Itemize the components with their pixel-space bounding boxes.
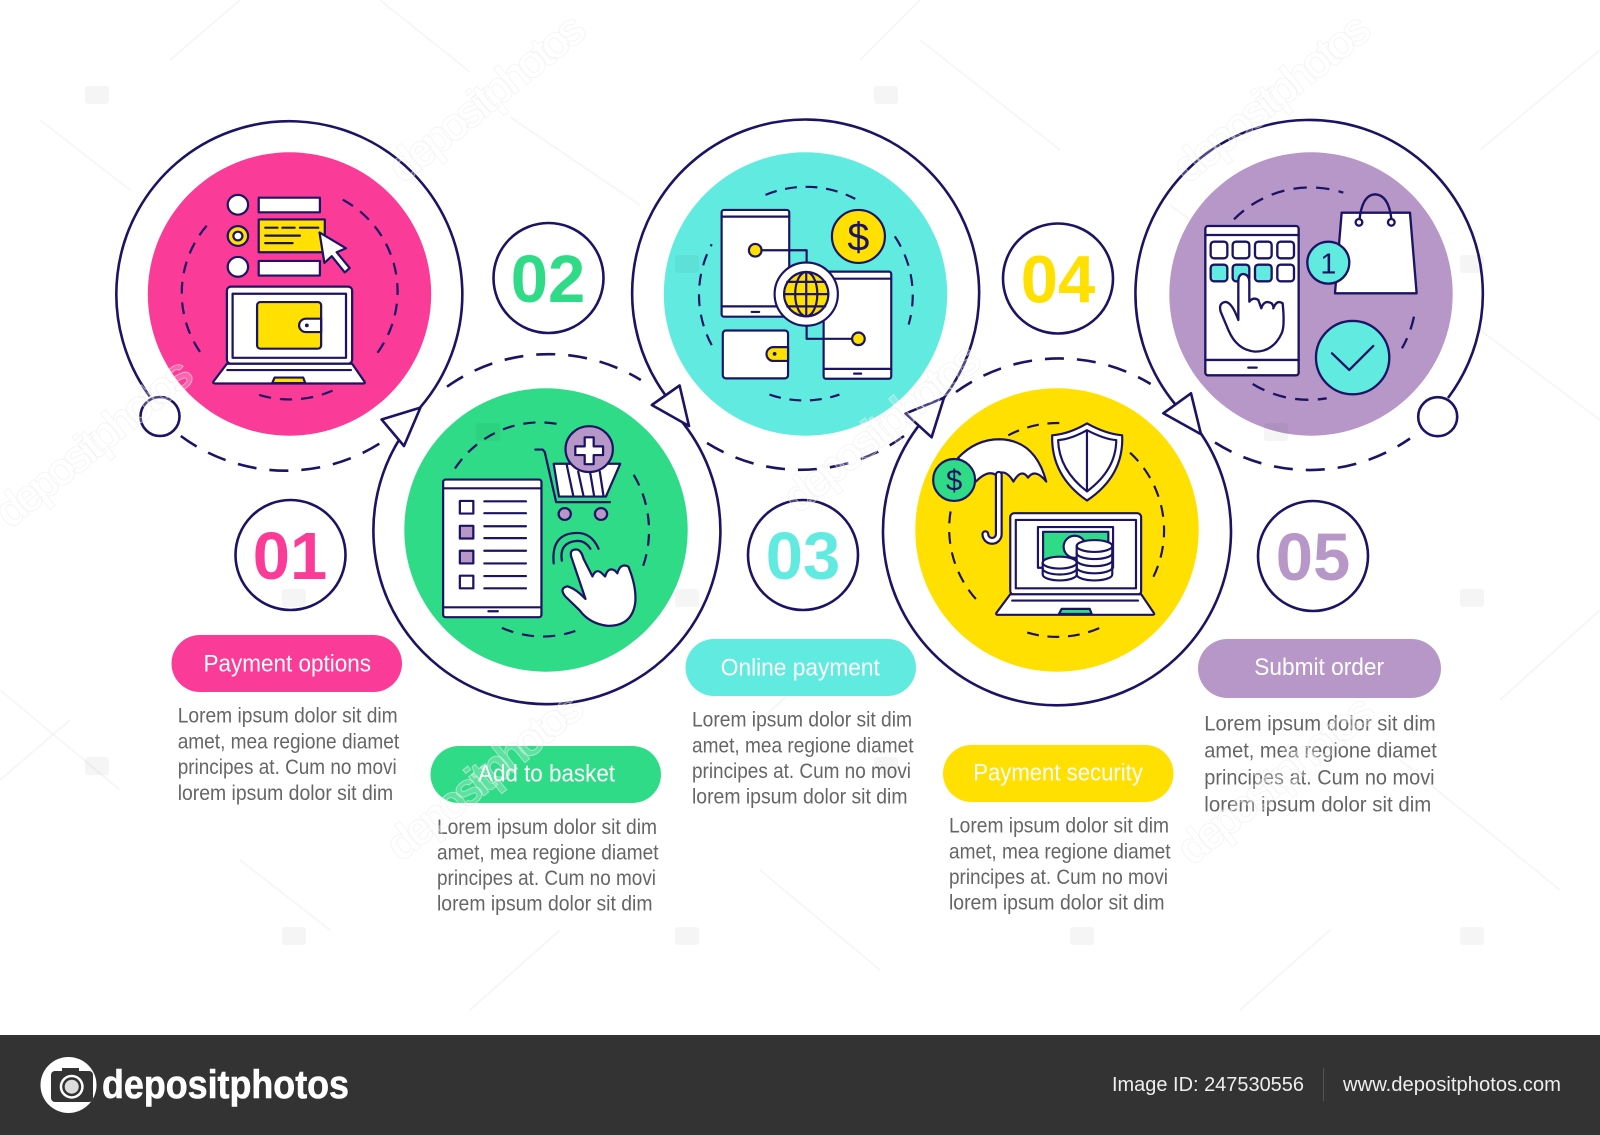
step 2 description bbox=[437, 816, 659, 916]
step 4 number badge bbox=[1003, 224, 1113, 334]
icon: umbrella, shield and laptop with money bbox=[933, 423, 1164, 637]
step 2 description: amet, mea regione diamet bbox=[437, 842, 659, 864]
step 3 description: lorem ipsum dolor sit dim bbox=[692, 786, 908, 809]
step 4 number badge: 04 bbox=[1021, 242, 1095, 318]
step 5 dashed arc bbox=[1215, 438, 1410, 470]
step 1 colour disc bbox=[148, 152, 431, 436]
step 4 description: principes at. Cum no movi bbox=[949, 866, 1168, 889]
step 2 label pill bbox=[430, 746, 661, 803]
footer bar bbox=[0, 1035, 1600, 1135]
step 4 outer ring bbox=[883, 422, 1231, 705]
step 3 number badge bbox=[748, 500, 858, 610]
step 2 description: Lorem ipsum dolor sit dim bbox=[437, 816, 657, 839]
step 5 description: principes at. Cum no movi bbox=[1204, 767, 1435, 790]
footer website: www.depositphotos.com bbox=[1342, 1074, 1561, 1096]
step 1 number badge: 01 bbox=[253, 519, 327, 594]
step 2 number badge: 02 bbox=[511, 242, 585, 317]
watermark wordmarks: depositphotos bbox=[375, 679, 594, 871]
step 4 label pill: Payment security bbox=[973, 760, 1143, 787]
step 5 number badge: 05 bbox=[1276, 520, 1350, 595]
step 3 outer ring bbox=[632, 120, 979, 398]
step 2 number badge bbox=[494, 223, 604, 333]
step 1: payment options bbox=[116, 121, 462, 805]
watermark camera marks bbox=[85, 86, 1484, 945]
step 5 end node bbox=[1418, 397, 1457, 436]
step 4 label pill bbox=[943, 745, 1174, 802]
arrow: step 4 to step 5 bbox=[1163, 393, 1201, 434]
icon: devices, globe and wallet bbox=[699, 187, 913, 401]
step 1 description: amet, mea regione diamet bbox=[178, 730, 399, 753]
watermark wordmarks: depositphotos bbox=[377, 1, 596, 193]
watermark wordmarks: depositphotos bbox=[772, 331, 991, 523]
step 1 label pill: Payment options bbox=[204, 650, 371, 678]
step 2: add to basket bbox=[373, 223, 720, 916]
step 3 label pill bbox=[686, 639, 916, 696]
step 2 description: lorem ipsum dolor sit dim bbox=[437, 893, 652, 916]
footer image id: Image ID: 247530556 bbox=[1112, 1074, 1304, 1096]
footer logo wordmark: depositphotos bbox=[102, 1063, 349, 1107]
footer separator bbox=[1323, 1068, 1324, 1101]
arrow: step 2 to step 3 bbox=[652, 386, 689, 426]
step 4 description bbox=[949, 815, 1171, 914]
step 1 description bbox=[178, 705, 399, 805]
step 2 description: principes at. Cum no movi bbox=[437, 867, 656, 890]
watermark wordmarks: depositphotos bbox=[1166, 683, 1385, 875]
step 3 dashed arc bbox=[707, 436, 904, 470]
step 5 description: Lorem ipsum dolor sit dim bbox=[1204, 713, 1436, 736]
arrow: step 1 to step 2 bbox=[382, 408, 420, 446]
step 5 outer ring bbox=[1135, 120, 1483, 404]
step 1 outer ring bbox=[116, 121, 462, 408]
step 5 label pill bbox=[1198, 639, 1441, 698]
step 3: online payment bbox=[632, 120, 979, 809]
step 1 description: Lorem ipsum dolor sit dim bbox=[178, 705, 398, 728]
step 3 colour disc bbox=[664, 152, 947, 436]
watermark wordmarks bbox=[0, 1, 1385, 875]
step 4 description: lorem ipsum dolor sit dim bbox=[949, 891, 1164, 914]
step 1 label pill bbox=[172, 635, 402, 692]
icon: tablet list, basket and tapping hand bbox=[443, 422, 649, 637]
step 1 dashed return arc bbox=[181, 436, 388, 471]
step 2 outer ring bbox=[373, 417, 720, 704]
step 5 description: amet, mea regione diamet bbox=[1204, 739, 1437, 762]
step 3 description: amet, mea regione diamet bbox=[692, 734, 914, 757]
footer logo mark bbox=[40, 1057, 96, 1113]
step 1 start node bbox=[140, 397, 180, 436]
icon: phone keypad, shopping bag and check mark bbox=[1205, 187, 1417, 400]
step 4 description: Lorem ipsum dolor sit dim bbox=[949, 815, 1169, 838]
step 3 description bbox=[692, 709, 914, 809]
step 1 number badge bbox=[236, 500, 346, 610]
step 4 colour disc bbox=[915, 388, 1199, 672]
step 1 description: principes at. Cum no movi bbox=[178, 756, 397, 779]
connector arrows bbox=[382, 386, 1201, 446]
icon: devices, globe and wallet: $ bbox=[847, 215, 869, 259]
step 4 description: amet, mea regione diamet bbox=[949, 840, 1171, 863]
step 4 dashed arc bbox=[956, 358, 1151, 392]
step 4: payment security bbox=[883, 224, 1231, 914]
step 2 label pill: Add to basket bbox=[478, 761, 615, 788]
watermark wordmarks: depositphotos bbox=[1162, 1, 1381, 193]
arrow: step 3 to step 4 bbox=[906, 398, 944, 437]
step 3 description: principes at. Cum no movi bbox=[692, 760, 911, 783]
step 5: submit order bbox=[1135, 120, 1483, 817]
icon: umbrella, shield and laptop with money: $ bbox=[946, 465, 962, 497]
step 5 label pill: Submit order bbox=[1254, 654, 1384, 681]
step 1 description: lorem ipsum dolor sit dim bbox=[178, 782, 393, 805]
step 3 label pill: Online payment bbox=[721, 654, 880, 681]
icon: wallet on laptop with payment options bbox=[182, 195, 398, 399]
step 2 dashed arc bbox=[447, 354, 641, 387]
step 3 number badge: 03 bbox=[766, 519, 840, 594]
step 2 colour disc bbox=[404, 388, 688, 672]
step 5 number badge bbox=[1258, 501, 1368, 611]
step 3 description: Lorem ipsum dolor sit dim bbox=[692, 709, 912, 732]
step 5 description: lorem ipsum dolor sit dim bbox=[1204, 794, 1431, 817]
step 5 colour disc bbox=[1169, 152, 1453, 436]
icon: phone keypad, shopping bag and check mark: 1 bbox=[1320, 248, 1336, 280]
step 5 description bbox=[1204, 713, 1437, 817]
